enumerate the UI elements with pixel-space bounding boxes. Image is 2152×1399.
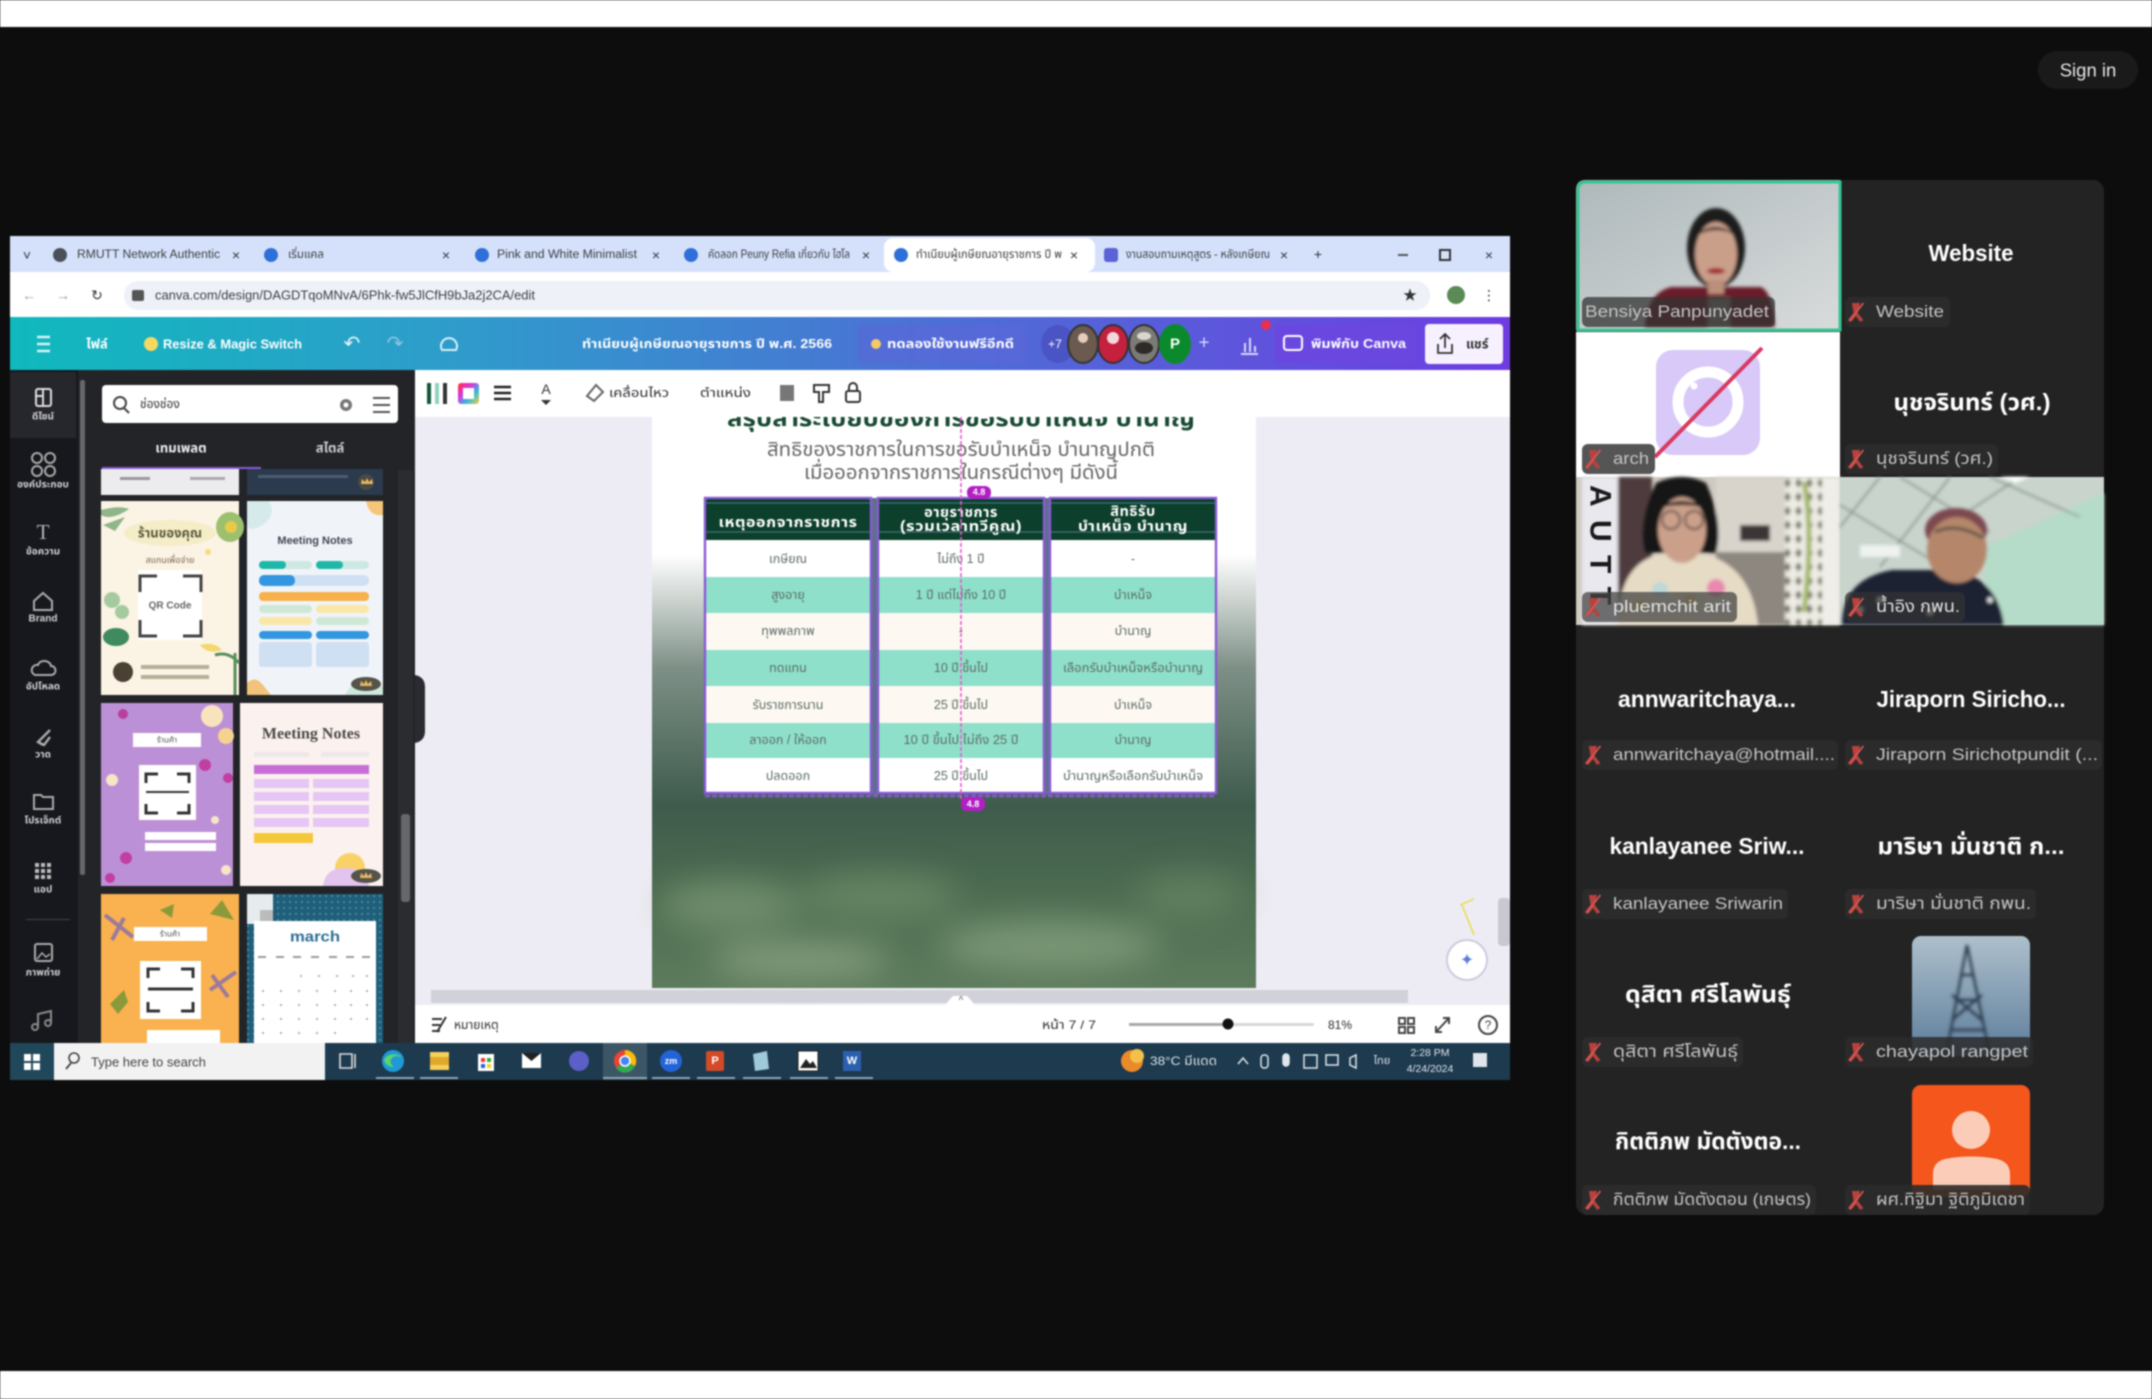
- template: QR purple floral: [101, 703, 234, 886]
- rail icon: photos: ภาพถ่าย: [26, 966, 60, 978]
- canva top toolbar: Resize & Magic Switch: [163, 336, 302, 352]
- rail icon: elements: องค์ประกอบ: [17, 480, 69, 490]
- name label: [1582, 297, 1775, 327]
- table rows text: บำเหน็จ: [1114, 698, 1152, 712]
- document toolbar: ตำแหน่ง: [700, 386, 751, 400]
- rail icon: projects: โปรเจ็กต์: [25, 814, 61, 826]
- browser tab strip: ×: [1280, 247, 1288, 263]
- search box: ช่องช่อง: [140, 397, 180, 411]
- tile: Website: Website: [1876, 303, 1944, 321]
- template row 0 partial: [101, 469, 383, 495]
- status bar: ?: [1485, 1018, 1492, 1032]
- template: meeting notes blue: Meeting Notes: [277, 535, 353, 547]
- rail icon: uploads: อัปโหลด: [26, 680, 60, 692]
- tile: Jiraporn: [1845, 686, 2102, 770]
- rail icon: text: T: [37, 520, 50, 544]
- table rows text: ทดแทน: [769, 661, 807, 675]
- browser tab strip: ×: [652, 247, 660, 263]
- rail icon: uploads: [26, 661, 60, 692]
- tile: Marisa: มาริษา มั่นชาติ กพน.: [1876, 893, 2031, 913]
- spacing guide: [961, 417, 991, 811]
- browser tab strip: RMUTT Network Authentic: [77, 249, 220, 261]
- table rows text: -: [959, 624, 963, 638]
- browser tab strip: ×: [862, 247, 870, 263]
- header cells: อายุราชการ: [924, 505, 998, 521]
- weather and clock tray: 4/24/2024: [1407, 1063, 1454, 1075]
- tile: Dusita: [1582, 981, 1791, 1067]
- address bar: ⋮: [1482, 287, 1496, 303]
- template: march calendar: [247, 894, 383, 1043]
- template: QR botanical: QR Code: [149, 600, 192, 612]
- selection outlines: [705, 498, 1216, 796]
- tile: Nam-ing: [1840, 477, 2104, 625]
- tile: kanlayanee: kanlayanee Sriw...: [1610, 833, 1804, 859]
- document subtitle: [767, 439, 1155, 484]
- template: meeting notes blue: [247, 501, 383, 695]
- rail icon: draw: [35, 730, 51, 760]
- document subtitle: เมื่อออกจากราชการในกรณีต่างๆ มีดังนี้: [804, 458, 1118, 484]
- browser tab strip: +: [1314, 246, 1322, 262]
- avatar: radio tower: [1912, 936, 2030, 1056]
- status bar: หน้า 7 / 7: [1042, 1018, 1096, 1032]
- document subtitle: สิทธิของราชการในการขอรับบำเหน็จ บำนาญปกติ: [767, 439, 1155, 461]
- panel: zoom participants gallery: [1576, 180, 2104, 1215]
- table rows text: เกษียณ: [769, 552, 807, 566]
- browser tab strip: เริ่มแคล: [288, 247, 324, 261]
- table rows text: ลาออก / ให้ออก: [749, 733, 827, 747]
- panel tabs: สไตล์: [316, 440, 344, 456]
- canva top toolbar: ไฟล์: [86, 336, 108, 352]
- browser tab strip: ×: [1070, 247, 1078, 263]
- collaborator avatars: [1068, 324, 1191, 364]
- table rows text: ปลดออก: [766, 769, 810, 783]
- tile: Kittipop: กิตติภพ มัดตังตอน (เกษตร): [1613, 1191, 1811, 1209]
- header cells: บำเหน็จ บำนาญ: [1078, 519, 1188, 535]
- table rows text: สูงอายุ: [771, 588, 805, 602]
- tile: chayapol: [1845, 936, 2033, 1067]
- assistant button: ✦: [1460, 950, 1474, 970]
- table rows text: บำนาญหรือเลือกรับบำเหน็จ: [1063, 769, 1203, 783]
- browser tab strip: [10, 236, 1510, 272]
- rail icon: elements: [17, 453, 69, 490]
- template: QR orange leaves: ร้านค้า: [160, 928, 180, 938]
- template: meeting notes pink: Meeting Notes: [262, 726, 360, 742]
- tile: pluemchit: [1576, 477, 1840, 625]
- rail icon: photos: [26, 944, 60, 978]
- table rows text: บำนาญ: [1115, 733, 1151, 747]
- tile: Nutcharin: นุชจรินทร์ (วศ.): [1876, 450, 1993, 468]
- panel: template browser: [86, 370, 415, 1043]
- browser tab strip: ×: [442, 247, 450, 263]
- tile: Nutcharin: นุชจรินทร์ (วศ.): [1894, 389, 2050, 416]
- browser tab strip: ×: [1485, 247, 1493, 263]
- tile: Dusita: ดุสิตา ศรีโลพันธุ์: [1613, 1043, 1738, 1061]
- tile: Kittipop: [1582, 1128, 1816, 1215]
- taskbar app icons: zm: [665, 1056, 677, 1066]
- template: meeting notes pink: [240, 703, 383, 886]
- tile: Nam-ing: น้ำอิง กพน.: [1876, 595, 1960, 616]
- address bar: →: [56, 287, 70, 303]
- browser tab strip: ×: [232, 247, 240, 263]
- panel scrollbar: [398, 470, 413, 1043]
- canvas area: [415, 370, 1510, 1043]
- browser tab strip: คัดลอก Peuny Refia เกี่ยวกับ ไฮโล: [708, 246, 850, 261]
- banner lettering: AUTT: [1584, 485, 1616, 605]
- template: QR orange leaves: [101, 894, 239, 1043]
- template: QR botanical: ร้านของคุณ: [138, 526, 202, 540]
- rail icon: design: [32, 389, 54, 422]
- table rows text: ไม่ถึง 1 ปี: [936, 552, 985, 566]
- collaborator avatars: P: [1170, 336, 1180, 352]
- photo: woman under ceiling: [1840, 477, 2104, 625]
- address bar: ↻: [91, 287, 103, 303]
- rail icon: text: ข้อความ: [26, 544, 60, 558]
- search box: [102, 385, 398, 423]
- canva top toolbar: [10, 317, 1510, 370]
- rail icon: brand: [29, 593, 57, 624]
- document page: [652, 405, 1256, 988]
- template: QR purple floral: ร้านค้า: [157, 734, 177, 744]
- table rows text: 1 ปี แต่ไม่ถึง 10 ปี: [916, 588, 1006, 602]
- avatar: default person: [1912, 1085, 2030, 1197]
- header cells: (รวมเวลาทวีคูณ): [900, 519, 1022, 536]
- canva top toolbar: ↷: [387, 333, 404, 355]
- taskbar search: Type here to search: [91, 1054, 206, 1070]
- row backgrounds: [705, 498, 1216, 795]
- canvas scrollbar: [431, 898, 1510, 1006]
- table rows text: [749, 552, 1203, 783]
- table rows text: เลือกรับบำเหน็จหรือบำนาญ: [1063, 661, 1203, 675]
- name label: Bensiya Panpunyadet: [1585, 303, 1769, 321]
- canva top toolbar: +7: [1048, 337, 1062, 351]
- template: march calendar: march: [290, 928, 340, 946]
- photo: presenter: [1645, 208, 1775, 327]
- tile: Bensiya: [1576, 180, 1840, 330]
- taskbar search: [54, 1043, 325, 1080]
- rail icon: projects: [25, 795, 61, 826]
- browser tab strip: Pink and White Minimalist: [497, 249, 638, 261]
- status bar: หมายเหตุ: [454, 1018, 499, 1032]
- table rows text: บำนาญ: [1115, 624, 1151, 638]
- table rows text: 25 ปี ขึ้นไป: [934, 696, 988, 712]
- tile: Nutcharin: [1845, 389, 2050, 474]
- tile: kanlayanee: kanlayanee Sriwarin: [1613, 895, 1783, 913]
- status bar: 81%: [1328, 1018, 1352, 1032]
- bottom white band: [0, 1371, 2152, 1399]
- taskbar app icons: [340, 1043, 873, 1080]
- canva top toolbar: ทดลองใช้งานฟรีอีกดี: [887, 337, 1014, 351]
- canva top toolbar: +: [1198, 332, 1210, 354]
- browser tab strip: งานสอบถามเหตุสูตร - หลังเกษียณ: [1126, 248, 1270, 261]
- blurred grass photo: [660, 873, 1245, 978]
- table rows text: ทุพพลภาพ: [761, 624, 815, 638]
- weather and clock tray: ไทย: [1373, 1055, 1390, 1067]
- status bar: [415, 1005, 1510, 1043]
- canvas scrollbar: ^: [959, 996, 964, 1006]
- address bar: ←: [22, 287, 36, 303]
- collapse handle: [415, 675, 425, 743]
- tile: kanlayanee: [1582, 833, 1804, 919]
- icon: camera logo crossed out: [1655, 348, 1762, 457]
- spacing guide: 4.8: [967, 799, 979, 809]
- assistant button: [1447, 899, 1487, 980]
- template: QR botanical: [101, 501, 244, 695]
- document title (clipped by toolbar): สรุปสาระเบียบของการขอรับบำเหน็จ บำนาญ: [727, 405, 1195, 432]
- header cells: [705, 498, 1216, 540]
- windows taskbar: [10, 1043, 1510, 1080]
- tile: Kittipop: กิตติภพ มัดตังตอ...: [1615, 1128, 1801, 1154]
- tile: arch: arch: [1613, 450, 1649, 468]
- address bar: canva.com/design/DAGDTqoMNvA/6Phk-fw5JlCfH9bJa2j2CA/edit: [155, 288, 535, 302]
- document toolbar: A: [541, 381, 551, 397]
- tile: Marisa: [1845, 831, 2064, 919]
- tile: annwaritchaya: annwaritchaya...: [1618, 686, 1796, 712]
- tile: Thitima: ผศ.ทิฐิมา ฐิติภูมิเดชา: [1876, 1191, 2025, 1209]
- tile: arch: [1576, 332, 1840, 477]
- tile: Jiraporn: Jiraporn Siricho...: [1876, 686, 2066, 712]
- tile: chayapol: chayapol rangpet: [1876, 1043, 2028, 1061]
- address bar: ★: [1403, 287, 1417, 303]
- tile: annwaritchaya: [1582, 686, 1838, 770]
- tile: Website: [1845, 240, 2014, 327]
- canva top toolbar: ทำเนียบผู้เกษียณอายุราชการ ปี พ.ศ. 2566: [582, 337, 832, 352]
- tile: Website: Website: [1928, 240, 2014, 266]
- photo: woman with glasses in office: [1582, 477, 1840, 625]
- table rows text: -: [1131, 552, 1135, 566]
- template: QR botanical: สแกนเพื่อจ่าย: [146, 553, 194, 565]
- browser tab strip: ทำเนียบผู้เกษียณอายุราชการ ปี พ: [916, 247, 1062, 261]
- taskbar app icons: P: [711, 1055, 719, 1067]
- weather and clock tray: [1121, 1047, 1487, 1075]
- rail icon: draw: วาด: [35, 750, 51, 760]
- top white band: [0, 0, 2152, 27]
- browser tab strip: ˅: [23, 247, 31, 263]
- rail icon: text: [26, 520, 60, 558]
- panel tabs: เทมเพลต: [155, 440, 207, 456]
- tile: Thitima: [1845, 1085, 2030, 1215]
- tile: Dusita: ดุสิตา ศรีโลพันธุ์: [1625, 981, 1791, 1008]
- rail icon: design: ดีไซน์: [32, 410, 54, 422]
- table rows text: บำเหน็จ: [1114, 588, 1152, 602]
- table rows text: 10 ปี ขึ้นไป: [934, 659, 988, 675]
- left icon rail: [10, 370, 86, 1043]
- rail icon: apps: แอป: [34, 884, 52, 896]
- weather and clock tray: 38°C มีแดด: [1150, 1054, 1217, 1068]
- rail icon: brand: Brand: [29, 614, 57, 624]
- header cells: สิทธิรับ: [1110, 504, 1156, 520]
- tile: Jiraporn: Jiraporn Sirichotpundit (...: [1876, 746, 2098, 764]
- rail icon: apps: [34, 863, 52, 896]
- tile: pluemchit: pluemchit arit: [1613, 598, 1731, 616]
- canva top toolbar: พิมพ์กับ Canva: [1311, 337, 1407, 351]
- rail icon: audio: [32, 1011, 51, 1030]
- weather and clock tray: 2:28 PM: [1410, 1047, 1450, 1059]
- tile: annwaritchaya: annwaritchaya@hotmail....: [1613, 746, 1835, 764]
- panel tabs: [102, 440, 344, 469]
- spacing guide: 4.8: [973, 487, 985, 497]
- document toolbar: เคลื่อนไหว: [609, 384, 669, 400]
- sign in button: [2038, 51, 2138, 89]
- tile: Marisa: มาริษา มั่นชาติ ก...: [1878, 831, 2064, 859]
- document toolbar: [415, 370, 1510, 417]
- table rows text: 10 ปี ขึ้นไป ไม่ถึง 25 ปี: [904, 731, 1018, 747]
- panel: shared browser window: [10, 236, 1510, 1080]
- taskbar app icons: W: [847, 1055, 858, 1067]
- table rows text: 25 ปี ขึ้นไป: [934, 767, 988, 783]
- canva top toolbar: ↶: [344, 333, 360, 355]
- canva top toolbar: แชร์: [1466, 336, 1489, 352]
- header cells: เหตุออกจากราชการ: [718, 515, 858, 531]
- retirement benefit table: [705, 498, 1216, 796]
- address bar: [10, 272, 1510, 317]
- windows logo: [24, 1054, 40, 1070]
- table rows text: รับราชการนาน: [753, 698, 823, 712]
- sign in button: Sign in: [2060, 60, 2116, 80]
